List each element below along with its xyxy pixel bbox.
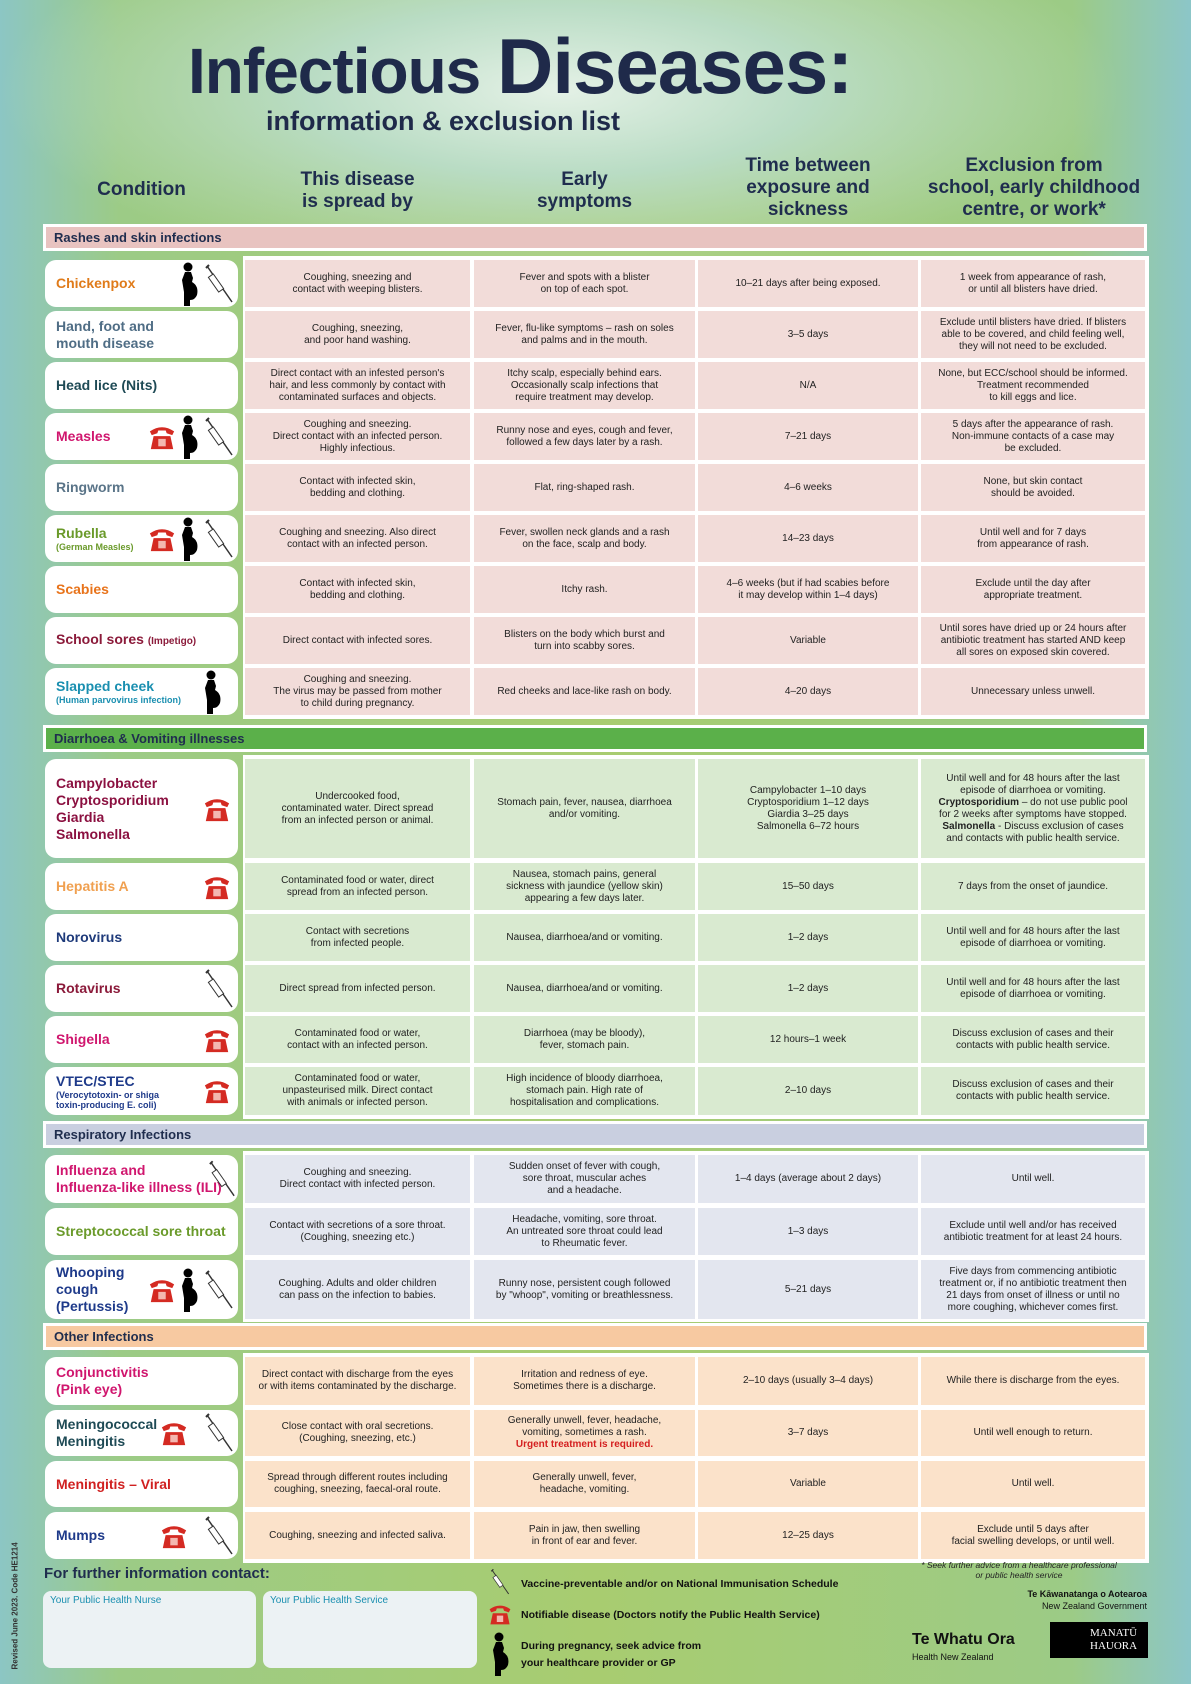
row: scabies: 4–6 weeks (but if had scabies before <box>727 578 889 588</box>
row: hepatitis A: Hepatitis A <box>56 878 129 894</box>
logo: Manatu Hauora: MANATŪ <box>1090 1627 1137 1639</box>
row: head lice <box>45 362 1145 409</box>
row: slapped cheek: 4–20 days <box>785 686 831 696</box>
legend: pregnancy <box>493 1632 701 1676</box>
contact box: nurse <box>43 1591 256 1668</box>
row: chickenpox: Chickenpox <box>56 275 135 291</box>
row: meningococcal: Until well enough to return. <box>974 1427 1092 1438</box>
row: strep throat: An untreated sore throat could lead <box>506 1226 663 1236</box>
row: norovirus: from infected people. <box>311 938 404 948</box>
row: whooping cough: treatment or, if no antibiotic treatment then <box>939 1278 1127 1288</box>
row: head lice: hair, and less commonly by contact with <box>269 380 446 390</box>
row: campylobacter etc: for 2 weeks after symptoms have stopped. <box>939 808 1127 820</box>
row: strep throat: antibiotic treatment for at least 24 hours. <box>944 1232 1122 1242</box>
row: hepatitis A: Contaminated food or water, direct <box>281 874 434 886</box>
row: rotavirus: Rotavirus <box>56 980 121 996</box>
row: campylobacter etc: Until well and for 48 hours after the last <box>946 772 1120 784</box>
row: campylobacter etc: Campylobacter 1–10 days <box>750 784 866 796</box>
row: VTEC: High incidence of bloody diarrhoea, <box>506 1073 663 1084</box>
row: scabies: bedding and clothing. <box>310 590 405 600</box>
side note: revised: Revised June 2023. Code HE1214 <box>10 1542 20 1670</box>
row: school sores: Direct contact with infected sores. <box>283 634 432 646</box>
legend: notifiable: Notifiable disease (Doctors notify the Public Health Service) <box>521 1609 820 1621</box>
row: measles: be excluded. <box>1005 442 1061 454</box>
row: school sores: Until sores have dried up or 24 hours after <box>940 622 1126 634</box>
row: school sores: turn into scabby sores. <box>534 640 635 652</box>
row: campylobacter etc: Stomach pain, fever, nausea, diarrhoea <box>497 796 672 808</box>
row: hepatitis A: Nausea, stomach pains, general <box>513 868 656 880</box>
row: strep throat <box>45 1208 1145 1255</box>
row: mumps: Mumps <box>56 1527 105 1543</box>
row: hepatitis A <box>45 863 1145 910</box>
row: chickenpox <box>45 260 1145 307</box>
row: chickenpox: on top of each spot. <box>541 284 628 294</box>
section bar: respiratory: Respiratory Infections <box>54 1127 191 1142</box>
row: measles: Highly infectious. <box>320 442 395 454</box>
subtitle: information & exclusion list <box>266 106 620 136</box>
row: rotavirus <box>45 965 1145 1012</box>
row: whooping cough <box>45 1260 1145 1319</box>
row: ringworm: bedding and clothing. <box>310 488 405 498</box>
row: chickenpox: contact with weeping blisters. <box>292 284 423 294</box>
row: hand foot mouth: and poor hand washing. <box>304 334 411 346</box>
row: slapped cheek: The virus may be passed from mother <box>273 686 442 696</box>
row: hepatitis A: spread from an infected person. <box>287 886 428 898</box>
row: rubella: 14–23 days <box>782 532 834 544</box>
row: whooping cough: (Pertussis) <box>56 1298 128 1314</box>
row: influenza: Influenza and <box>56 1162 145 1178</box>
row: scabies: Itchy rash. <box>561 584 608 594</box>
row: slapped cheek: Coughing and sneezing. <box>304 674 411 684</box>
legend: pregnancy: During pregnancy, seek advice from <box>521 1640 701 1652</box>
row: norovirus: Norovirus <box>56 929 122 945</box>
row: rubella <box>45 515 1145 562</box>
legend: pregnancy: your healthcare provider or GP <box>521 1657 676 1669</box>
row: rubella: on the face, scalp and body. <box>522 538 647 550</box>
row: shigella: Diarrhoea (may be bloody), <box>524 1028 645 1038</box>
row: meningitis viral: Spread through different routes including <box>267 1472 448 1483</box>
row: meningitis viral: Variable <box>790 1478 826 1489</box>
row: VTEC: 2–10 days <box>785 1085 831 1096</box>
row: strep throat: to Rheumatic fever. <box>541 1238 628 1248</box>
contact box: nurse: Your Public Health Nurse <box>50 1595 161 1606</box>
row: mumps: Pain in jaw, then swelling <box>529 1524 640 1534</box>
row: measles <box>45 413 1145 460</box>
row: meningitis viral: Until well. <box>1012 1478 1054 1489</box>
row: campylobacter etc <box>45 759 1145 858</box>
row: scabies: appropriate treatment. <box>984 590 1082 600</box>
row: rubella: Rubella <box>56 525 107 541</box>
row: rotavirus: Nausea, diarrhoea/and or vomiting. <box>506 982 663 994</box>
row: strep throat: Exclude until well and/or has received <box>949 1220 1117 1230</box>
header: condition: Condition <box>97 179 186 200</box>
row: influenza: 1–4 days (average about 2 days) <box>735 1173 881 1184</box>
row: ringworm: Flat, ring-shaped rash. <box>534 482 635 492</box>
row: slapped cheek: to child during pregnancy. <box>301 698 414 708</box>
row: campylobacter etc: and contacts with public health service. <box>946 832 1120 844</box>
row: norovirus: Contact with secretions <box>306 926 409 936</box>
row: campylobacter etc: Cryptosporidium <box>56 792 169 808</box>
logo: Te Whatu Ora: Health New Zealand <box>912 1652 994 1662</box>
row: norovirus: Until well and for 48 hours after the last <box>946 926 1120 936</box>
header: symptoms: symptoms <box>537 191 632 212</box>
row: slapped cheek: Unnecessary unless unwell. <box>971 686 1095 696</box>
row: measles: Runny nose and eyes, cough and fever, <box>496 424 673 436</box>
row: rotavirus: Until well and for 48 hours after the last <box>946 976 1120 988</box>
row: rubella: Fever, swollen neck glands and a rash <box>499 526 670 538</box>
row: whooping cough: can pass on the infection to babies. <box>279 1290 436 1300</box>
row: conjunctivitis: 2–10 days (usually 3–4 days) <box>743 1375 873 1386</box>
row: strep throat: Contact with secretions of a sore throat. <box>269 1220 446 1230</box>
row: campylobacter etc: and/or vomiting. <box>549 808 620 820</box>
row: shigella: Discuss exclusion of cases and their <box>952 1028 1114 1038</box>
section bar: diarrhoea <box>43 725 1147 752</box>
header: exclusion: Exclusion from <box>965 155 1103 176</box>
row: measles: Direct contact with an infected person. <box>273 430 442 442</box>
row: whooping cough: more coughing, whichever comes first. <box>948 1302 1118 1312</box>
row: meningitis viral: coughing, sneezing, faecal-oral route. <box>274 1484 441 1495</box>
row: influenza: Until well. <box>1012 1173 1054 1184</box>
header: time: exposure and <box>746 177 870 198</box>
footnote: * Seek further advice from a healthcare professional <box>921 1560 1117 1570</box>
row: VTEC: hospitalisation and complications. <box>510 1097 659 1108</box>
row: ringworm: 4–6 weeks <box>784 482 832 492</box>
section bar: respiratory <box>43 1121 1147 1148</box>
row: campylobacter etc: from an infected person or animal. <box>282 814 433 826</box>
row: campylobacter etc: Undercooked food, <box>315 790 400 802</box>
row: influenza: Influenza-like illness (ILI) <box>56 1179 222 1195</box>
row: rubella: Coughing and sneezing. Also direct <box>279 526 436 538</box>
logo: Manatu Hauora: HAUORA <box>1090 1640 1137 1652</box>
footnote: or public health service <box>976 1570 1062 1580</box>
row: head lice: Occasionally scalp infections that <box>511 380 658 390</box>
row: school sores: Variable <box>790 634 826 646</box>
logo: Manatu Hauora <box>1050 1622 1148 1658</box>
row: hepatitis A: sickness with jaundice (yellow skin) <box>506 880 663 892</box>
row: VTEC: stomach pain. High rate of <box>526 1085 643 1096</box>
row: mumps: in front of ear and fever. <box>532 1536 637 1546</box>
section bar: diarrhoea: Diarrhoea & Vomiting illnesses <box>54 731 244 746</box>
row: measles: Non-immune contacts of a case may <box>952 430 1114 442</box>
header: time: Time between <box>745 155 871 176</box>
legend: vaccine: Vaccine-preventable and/or on National Immunisation Schedule <box>521 1578 838 1590</box>
row: meningococcal: Urgent treatment is required. <box>516 1439 653 1450</box>
row: VTEC: (Verocytotoxin- or shiga <box>56 1090 159 1100</box>
row: campylobacter etc: Giardia 3–25 days <box>767 808 849 820</box>
row: VTEC <box>45 1067 1145 1115</box>
row: chickenpox: or until all blisters have dried. <box>968 284 1098 294</box>
row: strep throat: Streptococcal sore throat <box>56 1223 226 1239</box>
row: VTEC: VTEC/STEC <box>56 1072 135 1088</box>
row: slapped cheek: (Human parvovirus infection) <box>56 695 181 705</box>
row: conjunctivitis <box>45 1357 1145 1405</box>
row: influenza: Sudden onset of fever with cough, <box>509 1161 660 1172</box>
row: rotavirus: episode of diarrhoea or vomiting. <box>960 988 1106 1000</box>
row: head lice: Direct contact with an infested person's <box>271 368 444 378</box>
row: strep throat: Headache, vomiting, sore throat. <box>512 1214 657 1224</box>
row: shigella: contact with an infected person. <box>287 1040 428 1050</box>
row: mumps: Exclude until 5 days after <box>977 1524 1089 1534</box>
row: conjunctivitis: Sometimes there is a discharge. <box>513 1381 656 1392</box>
row: chickenpox: 1 week from appearance of rash, <box>960 272 1106 282</box>
row: meningococcal: Meningitis <box>56 1433 125 1449</box>
govt logo text <box>1027 1589 1148 1611</box>
row: head lice: N/A <box>800 380 816 390</box>
row: campylobacter etc: Cryptosporidium – do not use public pool <box>938 796 1127 808</box>
row: head lice: Treatment recommended <box>977 380 1089 390</box>
row: rotavirus: 1–2 days <box>788 982 828 994</box>
row: rubella: from appearance of rash. <box>977 538 1089 550</box>
legend <box>490 1568 838 1676</box>
row: hand foot mouth: Fever, flu-like symptoms – rash on soles <box>495 322 674 334</box>
section bar: rashes: Rashes and skin infections <box>54 230 222 245</box>
row: norovirus: Nausea, diarrhoea/and or vomiting. <box>506 932 663 942</box>
row: conjunctivitis: While there is discharge from the eyes. <box>947 1375 1119 1386</box>
row: whooping cough: 21 days from onset of illness or until no <box>946 1290 1120 1300</box>
row: head lice: Itchy scalp, especially behind ears. <box>507 368 662 378</box>
row: campylobacter etc: Cryptosporidium 1–12 days <box>747 796 869 808</box>
row: measles: 5 days after the appearance of rash. <box>953 418 1113 430</box>
row: meningococcal: vomiting, sometimes a rash. <box>522 1427 647 1438</box>
header: time: sickness <box>768 199 848 220</box>
header: symptoms <box>537 169 632 212</box>
row: hand foot mouth: Hand, foot and <box>56 318 154 334</box>
row: VTEC: unpasteurised milk. Direct contact <box>282 1085 433 1096</box>
row: influenza: sore throat, muscular aches <box>523 1173 646 1184</box>
row: school sores <box>45 617 1145 664</box>
row: conjunctivitis: or with items contaminated by the discharge. <box>259 1381 456 1392</box>
logo: Te Whatu Ora <box>912 1631 1015 1662</box>
header: spread <box>300 169 415 212</box>
row: strep throat: 1–3 days <box>788 1226 828 1236</box>
row: campylobacter etc: episode of diarrhoea or vomiting. <box>960 784 1106 796</box>
row: whooping cough: by "whoop", vomiting or breathlessness. <box>496 1290 673 1300</box>
row: slapped cheek: Red cheeks and lace-like rash on body. <box>497 686 672 696</box>
row: ringworm <box>45 464 1145 511</box>
row: hand foot mouth: Coughing, sneezing, <box>312 322 403 334</box>
row: hand foot mouth: able to be covered, and child feeling well, <box>942 328 1124 340</box>
header: exclusion <box>928 155 1140 220</box>
row: rubella: contact with an infected person. <box>287 538 428 550</box>
header: exclusion: centre, or work* <box>962 199 1106 220</box>
row: measles: Measles <box>56 428 110 444</box>
contact box: service: Your Public Health Service <box>270 1595 388 1606</box>
row: VTEC: with animals or infected person. <box>287 1097 428 1108</box>
row: head lice: Head lice (Nits) <box>56 377 157 393</box>
row: whooping cough: Whooping <box>56 1264 124 1280</box>
row: meningitis viral: headache, vomiting. <box>540 1484 629 1495</box>
row: rubella: Until well and for 7 days <box>980 526 1086 538</box>
row: VTEC: toxin-producing E. coli) <box>56 1100 156 1110</box>
row: ringworm: Contact with infected skin, <box>299 476 416 486</box>
row: hand foot mouth: mouth disease <box>56 334 154 350</box>
row: strep throat: (Coughing, sneezing etc.) <box>300 1232 414 1242</box>
row: meningococcal: Close contact with oral secretions. <box>282 1421 433 1432</box>
row: head lice: require treatment may develop. <box>515 392 654 402</box>
row: shigella: contacts with public health service. <box>956 1040 1110 1050</box>
row: whooping cough: cough <box>56 1281 98 1297</box>
row: conjunctivitis: (Pink eye) <box>56 1381 122 1397</box>
row: mumps: Coughing, sneezing and infected saliva. <box>269 1530 446 1540</box>
row: conjunctivitis: Conjunctivitis <box>56 1364 149 1380</box>
row: meningococcal: 3–7 days <box>788 1427 828 1438</box>
row: scabies <box>45 566 1145 613</box>
section bar: rashes <box>43 224 1147 251</box>
row: campylobacter etc: Campylobacter <box>56 774 157 790</box>
row: meningococcal: (Coughing, sneezing, etc.) <box>299 1433 416 1444</box>
row: whooping cough: 5–21 days <box>785 1284 831 1294</box>
row: meningococcal: Generally unwell, fever, headache, <box>508 1415 661 1426</box>
row: whooping cough: Five days from commencing antibiotic <box>949 1266 1117 1276</box>
header: exclusion: school, early childhood <box>928 177 1140 198</box>
row: meningococcal: Meningococcal <box>56 1416 157 1432</box>
row: mumps: 12–25 days <box>782 1530 834 1540</box>
header: spread: is spread by <box>302 191 413 212</box>
row: scabies: Scabies <box>56 581 109 597</box>
contact box: service <box>263 1591 477 1668</box>
row: measles: Coughing and sneezing. <box>304 418 411 430</box>
row: measles: 7–21 days <box>785 430 831 442</box>
row: rubella: (German Measles) <box>56 542 134 552</box>
row: shigella: fever, stomach pain. <box>540 1040 629 1050</box>
govt logo text: New Zealand Government <box>1042 1601 1147 1611</box>
row: chickenpox: 10–21 days after being exposed. <box>735 278 881 288</box>
row: meningitis viral: Generally unwell, fever, <box>533 1472 636 1483</box>
row: head lice: None, but ECC/school should be informed. <box>938 368 1128 378</box>
row: rotavirus: Direct spread from infected person. <box>279 982 436 994</box>
row: hepatitis A: 7 days from the onset of jaundice. <box>958 880 1108 892</box>
row: hand foot mouth: Exclude until blisters have dried. If blisters <box>940 316 1126 328</box>
row: VTEC: Contaminated food or water, <box>295 1073 420 1084</box>
row: chickenpox: Fever and spots with a blister <box>519 272 650 282</box>
row: influenza <box>45 1155 1145 1203</box>
row: campylobacter etc: Giardia <box>56 808 104 824</box>
row: hand foot mouth <box>45 311 1145 358</box>
header: time <box>745 155 871 220</box>
row: school sores: antibiotic treatment has started AND keep <box>941 634 1125 646</box>
row: chickenpox: Coughing, sneezing and <box>304 272 411 282</box>
row: hepatitis A: 15–50 days <box>782 880 834 892</box>
header: symptoms: Early <box>561 169 608 190</box>
section bar: other <box>43 1323 1147 1350</box>
row: campylobacter etc: Salmonella - Discuss exclusion of cases <box>942 820 1124 832</box>
row: VTEC: Discuss exclusion of cases and their <box>952 1079 1114 1090</box>
row: norovirus: 1–2 days <box>788 932 828 942</box>
row: shigella: Contaminated food or water, <box>295 1028 420 1038</box>
row: ringworm: Ringworm <box>56 479 124 495</box>
row: whooping cough: Coughing. Adults and older children <box>279 1278 436 1288</box>
row: campylobacter etc: contaminated water. Direct spread <box>282 802 433 814</box>
row: slapped cheek: Slapped cheek <box>56 678 154 694</box>
row: slapped cheek <box>45 668 1145 715</box>
logo: Te Whatu Ora: Te Whatu Ora <box>912 1631 1015 1648</box>
row: conjunctivitis: Direct contact with discharge from the eyes <box>262 1369 453 1380</box>
legend: vaccine <box>490 1568 838 1594</box>
row: meningococcal <box>45 1410 1145 1456</box>
row: head lice: contaminated surfaces and objects. <box>279 392 436 402</box>
legend: notifiable <box>490 1606 820 1624</box>
row: measles: followed a few days later by a rash. <box>506 436 663 448</box>
row: shigella: Shigella <box>56 1031 110 1047</box>
row: norovirus: episode of diarrhoea or vomiting. <box>960 938 1106 948</box>
row: scabies: Exclude until the day after <box>975 578 1091 588</box>
row: influenza: Coughing and sneezing. <box>304 1167 411 1178</box>
row: hand foot mouth: 3–5 days <box>788 328 828 340</box>
footnote <box>921 1560 1117 1580</box>
row: whooping cough: Runny nose, persistent cough followed <box>499 1278 670 1288</box>
footer heading: For further information contact: <box>44 1565 270 1582</box>
row: ringworm: None, but skin contact <box>984 476 1082 486</box>
row: meningitis viral: Meningitis – Viral <box>56 1476 171 1492</box>
row: influenza: and a headache. <box>547 1185 622 1196</box>
row: ringworm: should be avoided. <box>991 488 1075 498</box>
title: Infectious Diseases: <box>188 22 852 110</box>
row: conjunctivitis: Irritation and redness of eye. <box>521 1369 648 1380</box>
row: hepatitis A: appearing a few days later. <box>525 892 644 904</box>
row: mumps: facial swelling develops, or until well. <box>952 1536 1114 1546</box>
row: school sores: School sores (Impetigo) <box>56 631 196 647</box>
row: meningitis viral <box>45 1461 1145 1507</box>
row: scabies: Contact with infected skin, <box>299 578 416 588</box>
govt logo text: Te Kāwanatanga o Aotearoa <box>1027 1589 1147 1599</box>
row: hand foot mouth: they will not need to be excluded. <box>959 340 1107 352</box>
row: school sores: Blisters on the body which burst and <box>504 628 665 640</box>
row: VTEC: contacts with public health service. <box>956 1091 1110 1102</box>
row: influenza: Direct contact with infected person. <box>280 1179 435 1190</box>
row: shigella: 12 hours–1 week <box>770 1034 846 1044</box>
row: school sores: all sores on exposed skin covered. <box>956 646 1110 658</box>
row: shigella <box>45 1016 1145 1063</box>
section bar: other: Other Infections <box>54 1329 154 1344</box>
row: hand foot mouth: and palms and in the mouth. <box>521 334 648 346</box>
row: campylobacter etc: Salmonella 6–72 hours <box>757 820 859 832</box>
row: mumps <box>45 1512 1145 1559</box>
row: norovirus <box>45 914 1145 961</box>
row: scabies: it may develop within 1–4 days) <box>738 590 878 600</box>
row: head lice: to kill eggs and lice. <box>989 392 1077 402</box>
row: campylobacter etc: Salmonella <box>56 826 130 842</box>
header: spread: This disease <box>300 169 415 190</box>
